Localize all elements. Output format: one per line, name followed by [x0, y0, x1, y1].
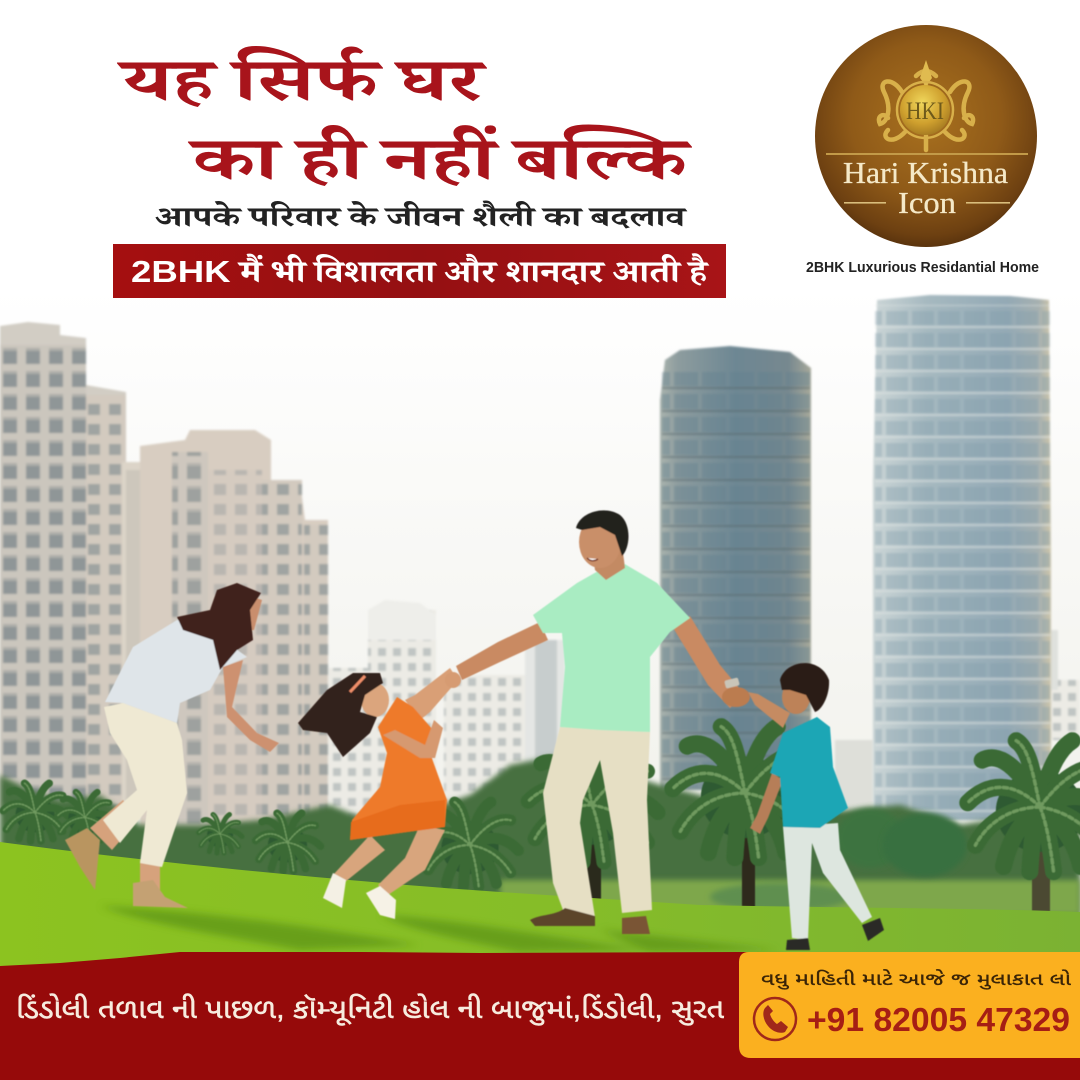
- banner text: 2BHK मैं भी विशालता और शानदार आती है: [131, 253, 710, 289]
- phone number: +91 82005 47329: [807, 1001, 1070, 1038]
- logo emblem: HKI: [906, 98, 944, 125]
- red banner: [113, 244, 726, 298]
- logo sub name: Icon: [898, 185, 957, 220]
- figure: father: [456, 510, 750, 934]
- title: line 1: यह सिर्फ घर: [116, 45, 488, 113]
- buildings: glass tower far right: [873, 295, 1051, 820]
- logo name: Hari Krishna: [843, 155, 1008, 190]
- logo badge: [815, 25, 1037, 247]
- figure: girl: [298, 668, 461, 919]
- subtitle: आपके परिवार के जीवन शैली का बदलाव: [155, 200, 688, 233]
- address text: ડિંડોલી તળાવ ની પાછળ, કૉમ્યૂનિટી હોલ ની બાજુમાં,ડિંડોલી, સુરત: [16, 993, 725, 1025]
- palm trees: [3, 727, 1080, 925]
- title: line 2: का ही नहीं बल्कि: [187, 123, 692, 192]
- logo caption: 2BHK Luxurious Residantial Home: [806, 259, 1039, 276]
- contact box: [739, 952, 1080, 1058]
- logo emblem: [879, 60, 973, 150]
- figure: boy: [748, 663, 884, 950]
- figure: woman: [65, 583, 279, 908]
- buildings: glass tower centre right: [660, 346, 811, 790]
- buildings: left residential towers: [0, 322, 328, 840]
- buildings: far background: [328, 600, 1080, 830]
- grass shadows: [100, 906, 780, 952]
- lawn: [0, 842, 1080, 975]
- tree line: [0, 755, 1080, 930]
- icon: phone: [754, 998, 796, 1040]
- visit prompt text: વધુ માહિતી માટે આજે જ મુલાકાત લો: [761, 969, 1072, 990]
- footer red band: [0, 952, 1080, 1080]
